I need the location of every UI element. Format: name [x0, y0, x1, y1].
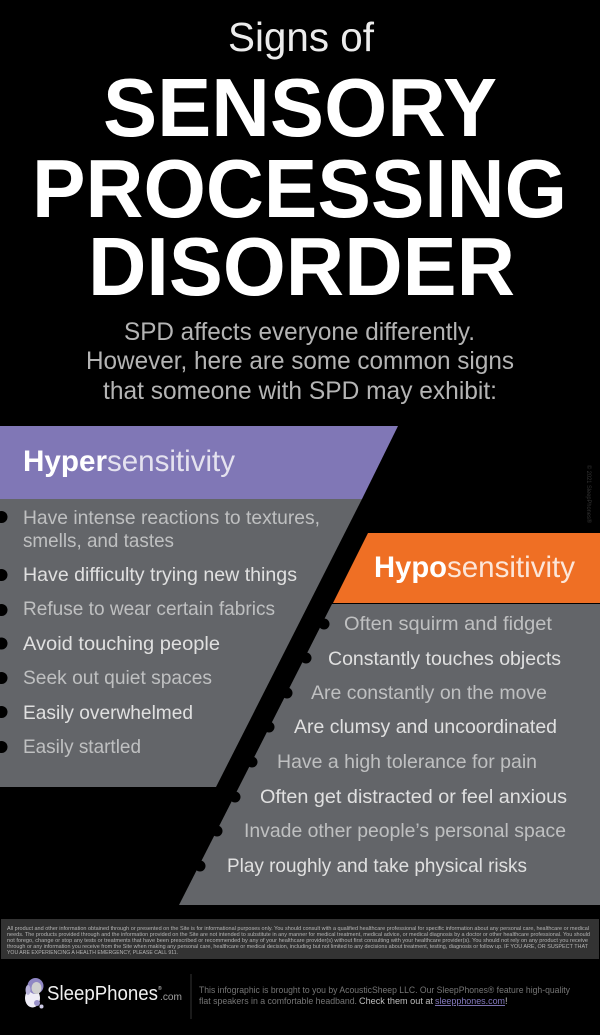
intro text	[86, 318, 514, 405]
list: hyposensitivity signs: Play roughly and take physical risks	[227, 855, 527, 877]
heading banner: hyposensitivity: sensitivity	[447, 551, 575, 584]
disclaimer box: not forego, change or stop any tests or treatments that have been prescribed or recommended by any of your healthcare provider(s) without first consulting with your healthcare provider(s). You should not rely on any product you receive	[7, 938, 588, 944]
divider	[190, 974, 192, 1019]
heading banner: hypersensitivity: sensitivity	[107, 445, 235, 478]
title	[32, 14, 567, 313]
title: Signs of: Signs of	[228, 14, 375, 60]
list: hyposensitivity signs: Are clumsy and uncoordinated	[294, 716, 557, 738]
logo: SleepPhones	[25, 978, 182, 1008]
intro text: However, here are some common signs	[86, 347, 514, 375]
logo: SleepPhones: SleepPhones	[47, 982, 158, 1005]
disclaimer box: YOU ARE EXPERIENCING A HEALTH EMERGENCY, PLEASE CALL 911.	[7, 950, 178, 956]
list: hypersensitivity signs	[23, 507, 320, 758]
panel body: hyposensitivity list background	[179, 604, 600, 905]
bullets: hypersensitivity	[0, 511, 8, 753]
heading banner: hypersensitivity: Hyper	[23, 445, 107, 478]
panel body: hypersensitivity list background	[0, 499, 362, 787]
intro text: that someone with SPD may exhibit:	[103, 377, 497, 405]
list: hypersensitivity signs: Refuse to wear certain fabrics	[23, 598, 275, 620]
list: hyposensitivity signs: Invade other people’s personal space	[244, 820, 566, 842]
sponsor text: flat speakers in a comfortable headband.	[199, 996, 357, 1006]
copyright note: © 2021 SleepPhones®	[585, 465, 592, 524]
list: hypersensitivity signs: Have difficulty trying new things	[23, 564, 297, 586]
list: hypersensitivity signs: Avoid touching people	[23, 633, 220, 655]
panel: hypersensitivity	[0, 426, 398, 787]
panel: hyposensitivity	[179, 533, 600, 905]
sponsor text: Check them out at	[359, 996, 433, 1006]
sponsor text: sleepphones.com	[435, 996, 505, 1006]
list: hypersensitivity signs: Easily overwhelmed	[23, 702, 193, 724]
list: hyposensitivity signs: Often get distracted or feel anxious	[260, 786, 567, 808]
list: hypersensitivity signs: Have intense reactions to textures,	[23, 507, 320, 529]
heading banner: hyposensitivity	[333, 533, 600, 603]
list: hyposensitivity signs: Have a high tolerance for pain	[277, 751, 537, 773]
disclaimer box	[1, 919, 599, 959]
list: hyposensitivity signs: Often squirm and fidget	[344, 613, 553, 635]
list: hypersensitivity signs: Seek out quiet spaces	[23, 667, 212, 689]
list: hyposensitivity signs	[227, 613, 567, 877]
heading banner: hypersensitivity	[0, 426, 398, 499]
logo: SleepPhones: .com	[160, 991, 182, 1003]
logo: SleepPhones: ®	[158, 985, 162, 992]
disclaimer box: needs. The products provided through and the information provided on the Site are not intended to substitute in any manner for medical treatment, medical advice, or medical diagnosis by a doctor or other healthcare professional. You should	[7, 932, 590, 938]
list: hypersensitivity signs: smells, and tastes	[23, 530, 174, 552]
heading banner: hyposensitivity: Hypo	[374, 551, 447, 584]
icon: sleeping sheep with headphones	[25, 978, 44, 1008]
sponsor text: !	[505, 996, 508, 1006]
sponsor text: This infographic is brought to you by AcousticSheep LLC. Our SleepPhones® feature high-quality	[199, 985, 570, 995]
disclaimer box: All product and other information obtained through or presented on the Site is for informational purposes only. You should consult with a qualified healthcare professional for specific information about any personal care, healthcare or medical	[7, 926, 589, 932]
sponsor text	[199, 985, 570, 1006]
disclaimer box: through or any information you receive from the Site when making any personal care, healthcare or medical decision, including but not limited to any decisions about treatment, testing, diagnosis or follow up. IF YOU ARE, OR SUSPECT THAT	[7, 944, 589, 950]
list: hypersensitivity signs: Easily startled	[23, 736, 141, 758]
list: hyposensitivity signs: Are constantly on the move	[311, 682, 547, 704]
title: PROCESSING: PROCESSING	[32, 142, 567, 235]
intro text: SPD affects everyone differently.	[124, 318, 475, 346]
title: DISORDER: DISORDER	[88, 220, 515, 313]
bullets: hyposensitivity	[194, 618, 330, 872]
title: SENSORY: SENSORY	[103, 61, 497, 154]
list: hyposensitivity signs: Constantly touches objects	[328, 648, 561, 670]
